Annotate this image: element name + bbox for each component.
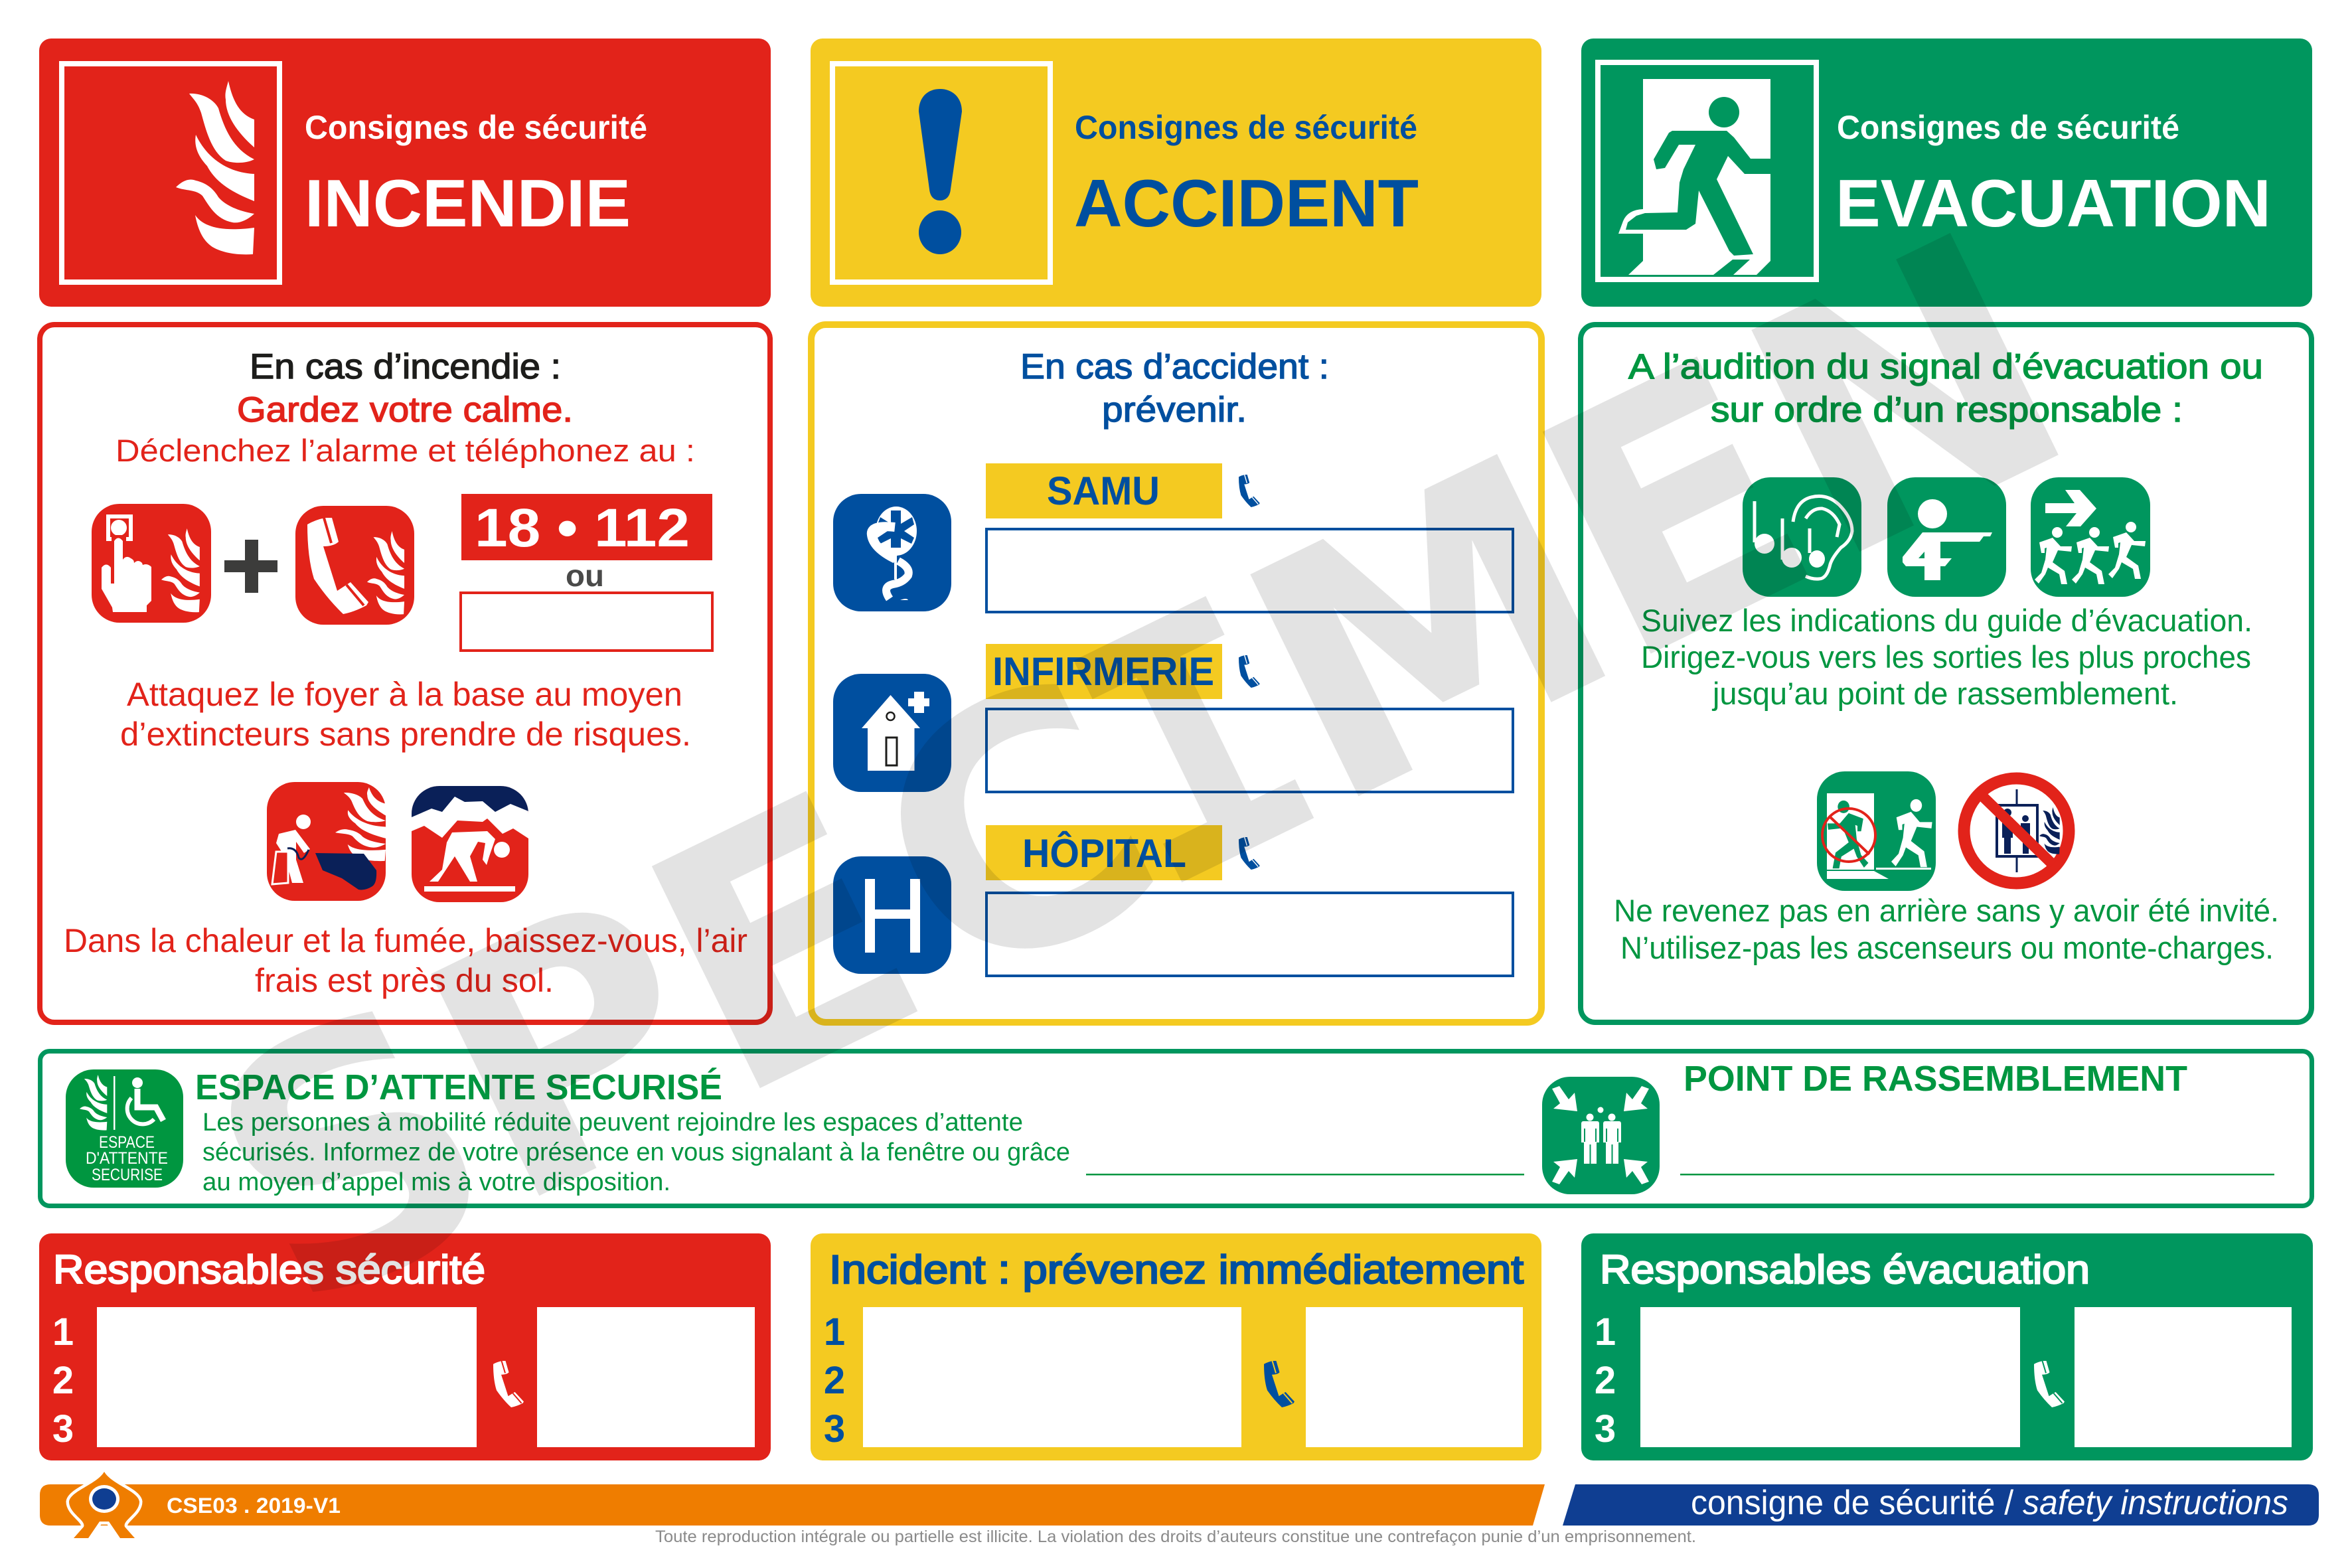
heading line 2: sur ordre d’un responsable :	[1711, 390, 2183, 430]
header subtitle: Consignes de sécurité	[1837, 109, 2179, 146]
icon: phone infirmerie	[1239, 655, 1260, 688]
instruction line 2: Dirigez-vous vers les sorties les plus proches	[1641, 639, 2251, 674]
icon: infirmerie	[833, 674, 951, 792]
list numbers: 3	[1595, 1407, 1616, 1450]
icon: safe waiting area: SECURISE	[92, 1166, 163, 1184]
input box: infirmerie	[986, 709, 1513, 792]
icon: safe waiting area: D'ATTENTE	[86, 1149, 168, 1168]
panel: assembly band	[40, 1052, 2312, 1206]
phone box	[2075, 1307, 2292, 1447]
icon: fire symbol	[62, 64, 279, 282]
phone box	[1306, 1307, 1523, 1447]
list numbers: 1	[52, 1310, 74, 1354]
label: samu: SAMU	[1047, 469, 1160, 513]
contacts: incident	[811, 1233, 1541, 1460]
text line 3: au moyen d’appel mis à votre disposition.	[202, 1168, 670, 1196]
instruction: smoke line 2: frais est près du sol.	[255, 962, 554, 999]
list numbers: 1	[824, 1310, 845, 1354]
label: or: ou	[566, 558, 604, 593]
header title: INCENDIE	[305, 167, 631, 241]
list numbers: 2	[52, 1359, 74, 1402]
footer: blue band	[1563, 1484, 2319, 1526]
header subtitle: Consignes de sécurité	[1075, 109, 1417, 146]
list numbers: 2	[1595, 1359, 1616, 1402]
panel: accident	[811, 325, 1541, 1022]
header title: ACCIDENT	[1074, 167, 1419, 241]
header: incendie	[39, 39, 771, 307]
heading: En cas d’incendie :	[250, 347, 561, 386]
instruction line 1: Suivez les indications du guide d’évacuation.	[1641, 603, 2252, 638]
icon: assembly point	[1542, 1077, 1660, 1194]
input box: number	[461, 593, 712, 651]
title: assembly point: POINT DE RASSEMBLEMENT	[1684, 1059, 2187, 1099]
icon: do not go back	[1817, 771, 1936, 891]
panel: evacuation	[1581, 325, 2312, 1022]
instruction: extinguisher line 1: Attaquez le foyer à la base au moyen	[127, 676, 682, 713]
icon: extinguisher	[267, 782, 386, 901]
icon: phone	[493, 1361, 524, 1407]
input box: hopital	[986, 893, 1513, 976]
list numbers: 3	[52, 1407, 74, 1450]
list numbers	[1595, 1310, 1616, 1450]
watermark: specimen: E	[595, 719, 975, 1174]
list numbers: 2	[824, 1359, 845, 1402]
icon: safe waiting area	[66, 1069, 183, 1188]
watermark: specimen: P	[374, 819, 769, 1282]
document code: CSE03 . 2019-V1	[167, 1494, 341, 1518]
icon: samu	[833, 494, 951, 611]
legal notice: Toute reproduction intégrale ou partielle est illicite. La violation des droits d’auteurs constitue une contrefaçon punie d’un emprisonnement.	[655, 1528, 1696, 1546]
name box	[97, 1307, 477, 1447]
list numbers: 1	[1595, 1310, 1616, 1354]
icon: evacuation group	[2031, 477, 2150, 597]
label: hopital: HÔPITAL	[1022, 831, 1186, 876]
instruction: alarm: Déclenchez l’alarme et téléphonez au :	[116, 433, 695, 468]
footer label: consigne de sécurité / safety instructions	[1691, 1484, 2288, 1522]
header subtitle: Consignes de sécurité	[305, 109, 647, 146]
list numbers: 3	[824, 1407, 845, 1450]
icon: alarm sound	[1743, 477, 1861, 597]
name box	[1640, 1307, 2020, 1447]
text line 1: Les personnes à mobilité réduite peuvent rejoindre les espaces d’attente	[202, 1109, 1023, 1137]
header: evacuation	[1581, 39, 2312, 307]
instruction: smoke line 1: Dans la chaleur et la fumée, baissez-vous, l’air	[64, 922, 747, 959]
logo	[69, 1472, 139, 1538]
footer: orange band	[40, 1472, 1545, 1538]
label: hopital	[986, 825, 1222, 880]
instruction: extinguisher line 2: d’extincteurs sans prendre de risques.	[120, 716, 691, 753]
watermark: specimen: E	[1486, 284, 1866, 740]
icon: phone samu	[1239, 475, 1260, 507]
watermark: specimen: N	[1694, 159, 2122, 637]
label: samu	[986, 463, 1222, 518]
icon: plus	[224, 540, 277, 593]
icon: exclamation mark	[832, 64, 1050, 282]
panel: incendie	[40, 325, 770, 1022]
icon: fire telephone	[295, 506, 414, 625]
instruction line 3: jusqu’au point de rassemblement.	[1711, 676, 2178, 711]
icon: phone	[1264, 1361, 1294, 1407]
contacts: responsables evacuation	[1581, 1233, 2313, 1460]
icon: phone	[2034, 1361, 2065, 1407]
icon: safe waiting area: ESPACE	[99, 1133, 155, 1152]
header: accident	[811, 39, 1541, 307]
phone box	[537, 1307, 755, 1447]
title: safe waiting area: ESPACE D’ATTENTE SECURISÉ	[195, 1067, 722, 1107]
icon: manual alarm	[92, 504, 211, 623]
emergency numbers: 18 • 112	[475, 498, 690, 558]
heading line 1: En cas d’accident :	[1020, 347, 1329, 386]
label: infirmerie: INFIRMERIE	[992, 649, 1214, 694]
heading line 2: prévenir.	[1102, 390, 1247, 430]
icon: crawl under smoke	[412, 786, 528, 902]
name box	[863, 1307, 1241, 1447]
watermark: specimen: M	[1193, 380, 1668, 882]
instruction line 4: Ne revenez pas en arrière sans y avoir été invité.	[1614, 893, 2279, 928]
watermark: specimen: S	[157, 927, 549, 1387]
watermark: specimen: I	[1019, 524, 1375, 967]
icon: phone hopital	[1239, 837, 1260, 870]
heading line 1: A l’audition du signal d’évacuation ou	[1628, 347, 2263, 386]
contacts title: Responsables sécurité	[53, 1247, 485, 1292]
contacts title: Incident : prévenez immédiatement	[829, 1247, 1524, 1292]
icon: emergency exit	[1598, 62, 1816, 279]
contacts: responsables securite	[39, 1233, 771, 1460]
header title: EVACUATION	[1836, 167, 2271, 241]
instruction line 5: N’utilisez-pas les ascenseurs ou monte-charges.	[1620, 930, 2274, 965]
watermark: specimen: C	[818, 602, 1214, 1065]
list numbers	[52, 1310, 74, 1450]
input box: samu	[986, 529, 1513, 612]
contacts title: Responsables évacuation	[1600, 1247, 2090, 1292]
text line 2: sécurisés. Informez de votre présence en vous signalant à la fenêtre ou grâce	[202, 1138, 1070, 1166]
icon: no elevator	[1964, 778, 2069, 883]
list numbers	[824, 1310, 845, 1450]
subheading: Gardez votre calme.	[237, 390, 573, 430]
icon: guide	[1887, 477, 2006, 597]
icon: hopital	[833, 856, 951, 974]
